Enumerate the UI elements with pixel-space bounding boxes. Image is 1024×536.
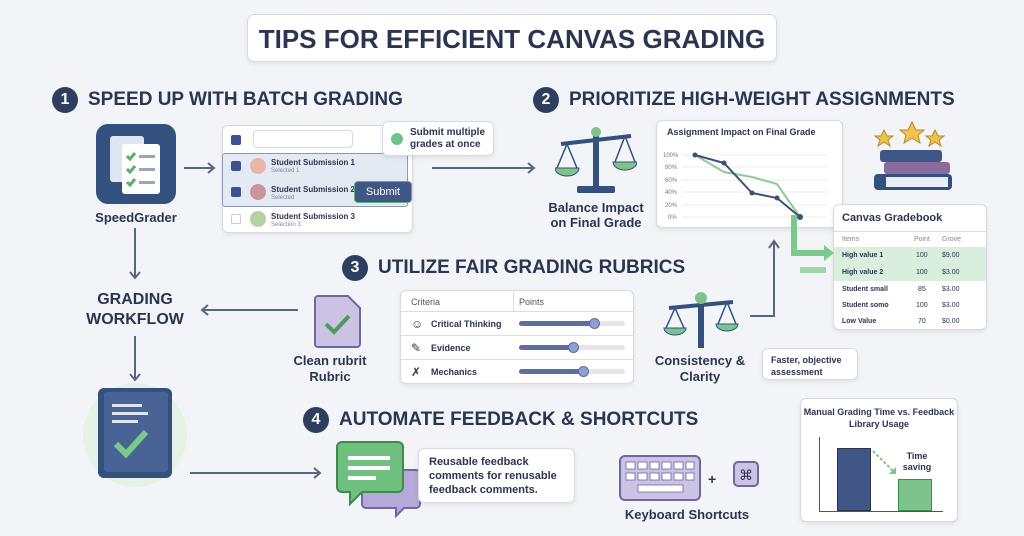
icon: keyboard: + [708,471,716,487]
chart: assignment impact: Assignment Impact on Final Grade [667,127,816,137]
panel: submissions list [222,125,413,233]
icon: keyboard: ⌘ [739,467,753,483]
panel: submissions list: Student Submission 2 [271,185,355,194]
icon: keyboard [619,455,759,501]
icon: SpeedGrader [96,124,176,204]
panel: rubric table [400,290,634,384]
arrow: to list [184,162,216,174]
chart: assignment impact [656,120,843,228]
panel: rubric table: ☺ [411,317,423,331]
chart: grading time bars: Time saving [903,451,931,472]
panel: rubric table: Mechanics [431,367,477,377]
icon: scale balance [555,127,637,193]
panel: canvas gradebook: Student somo [842,302,889,309]
heading 2: PRIORITIZE HIGH-WEIGHT ASSIGNMENTS [569,89,955,110]
rubric label: Clean rubrit Rubric [294,353,366,384]
panel: canvas gradebook: 100 [916,302,928,309]
submit button: Submit [366,186,400,198]
title: TIPS FOR EFFICIENT CANVAS GRADING [259,24,765,54]
arrow: book to chat [190,467,322,479]
callout: submit multiple: Submit multiple grades at once [410,127,485,150]
arrow: to section 2 [432,162,536,174]
panel: canvas gradebook: $3.00 [942,269,960,276]
arrow: rubric to workflow [200,304,298,316]
heading 3: UTILIZE FAIR GRADING RUBRICS [378,257,685,278]
panel: submissions list: Student Submission 1 [271,158,355,167]
heading 4: 4 [312,411,320,428]
panel: submissions list: Selected 1 [271,168,299,174]
panel: submissions list: Student Submission 3 [271,212,355,221]
chart: grading time bars [800,398,958,522]
panel: canvas gradebook: 85 [918,286,926,293]
chart: assignment impact: 80% [665,165,678,171]
panel: canvas gradebook: Low Value [842,318,876,325]
heading 4: AUTOMATE FEEDBACK & SHORTCUTS [339,409,698,430]
heading 2: 2 [542,91,550,108]
SpeedGrader label: SpeedGrader [95,210,177,225]
panel: canvas gradebook: Canvas Gradebook [842,212,942,224]
panel: canvas gradebook: $3.00 [942,286,960,293]
panel: canvas gradebook [833,204,987,330]
arrow: SpeedGrader down [129,228,141,280]
icon: gradebook book [83,383,187,487]
panel: submissions list: Selection 3 [271,222,301,228]
panel: canvas gradebook: $9.00 [942,252,960,259]
panel: submissions list: Selected [271,195,294,201]
heading 1: SPEED UP WITH BATCH GRADING [88,89,403,110]
chart: assignment impact: 60% [665,178,678,184]
panel: canvas gradebook: Point [914,236,930,243]
panel: canvas gradebook: Student small [842,286,888,293]
panel: rubric table: Criteria [411,297,440,307]
panel: rubric table: ✗ [411,365,421,379]
chart: assignment impact: 20% [665,203,678,209]
consistency label: Consistency & Clarity [655,353,745,384]
panel: rubric table: Critical Thinking [431,319,502,329]
callout: reusable feedback [418,448,575,503]
icon: chat bubbles [336,441,421,518]
chart: assignment impact: 100% [663,153,679,159]
panel: canvas gradebook: High value 2 [842,269,883,276]
panel: canvas gradebook: Items [842,236,859,243]
panel: canvas gradebook: $0.00 [942,318,960,325]
arrow: green to gradebook [791,215,834,273]
panel: rubric table: Evidence [431,343,471,353]
keyboard label: Keyboard Shortcuts [625,507,749,522]
icon: books with stars [874,121,952,190]
heading 3: 3 [351,259,359,276]
callout: faster objective [762,348,858,380]
balance label: Balance Impact on Final Grade [548,200,644,230]
heading 1: 1 [61,91,69,108]
panel: canvas gradebook: Grove [942,236,961,243]
grading workflow text: GRADING WORKFLOW [86,291,184,328]
callout: submit multiple [382,121,494,156]
panel: canvas gradebook: High value 1 [842,252,883,259]
icon: rubric doc [314,295,361,348]
panel: canvas gradebook: 100 [916,252,928,259]
title [247,14,777,62]
chart: assignment impact: 40% [665,190,678,196]
arrow: up to chart [750,239,780,317]
panel: rubric table: Points [519,297,544,307]
arrow: workflow down [129,336,141,382]
panel: canvas gradebook: 70 [918,318,926,325]
panel: canvas gradebook: $3.00 [942,302,960,309]
chart: grading time bars: Manual Grading Time vs. Feedback Library Usage [804,407,954,429]
callout: reusable feedback: Reusable feedback comments for renusable feedback comments. [429,456,557,496]
callout: faster objective: Faster, objective assessment [771,355,842,377]
submit button [354,181,412,203]
icon: consistency scale [664,292,738,348]
panel: canvas gradebook: 100 [916,269,928,276]
chart: assignment impact: 0% [668,215,677,221]
panel: rubric table: ✎ [411,341,421,355]
